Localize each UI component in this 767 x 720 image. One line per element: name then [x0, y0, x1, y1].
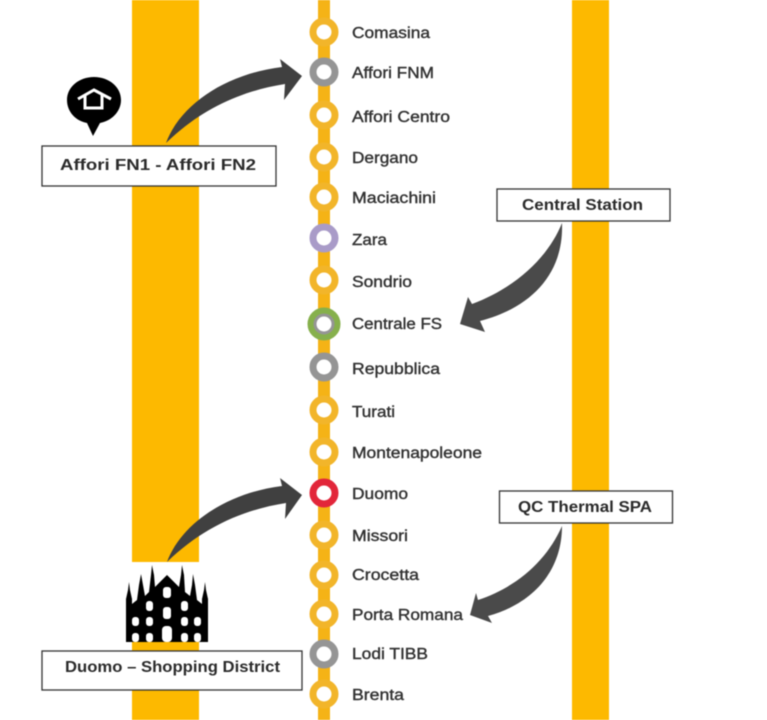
station markers	[311, 21, 337, 705]
station names: Repubblica	[352, 361, 440, 378]
callout: Central Station	[497, 189, 670, 221]
station names: Sondrio	[352, 274, 412, 291]
left yellow band	[132, 0, 199, 720]
station names: Montenapoleone	[352, 445, 482, 462]
station names: Dergano	[352, 150, 418, 167]
right yellow band	[572, 0, 609, 720]
callout: Duomo - Shopping District: Duomo – Shopping District	[65, 659, 280, 676]
icon: Duomo cathedral	[126, 565, 208, 642]
station names: Duomo	[352, 486, 408, 503]
station names: Zara	[352, 232, 387, 249]
arrow: Duomo	[167, 478, 302, 562]
arrow: QC Thermal SPA	[470, 526, 562, 623]
metro line	[318, 0, 330, 720]
station names: Lodi TIBB	[352, 646, 428, 663]
callout: QC Thermal SPA: QC Thermal SPA	[518, 499, 652, 516]
station names: Porta Romana	[352, 607, 463, 624]
station names: Missori	[352, 528, 408, 545]
white backing behind cathedral	[120, 562, 215, 642]
callout: QC Thermal SPA	[500, 491, 672, 523]
station names: Comasina	[352, 25, 430, 42]
station names: Maciachini	[352, 190, 436, 207]
station names: Turati	[352, 404, 395, 421]
icon: home pin	[67, 77, 121, 136]
station names: Brenta	[352, 687, 404, 704]
callout: Affori FN1 - Affori FN2: Affori FN1 - Affori FN2	[60, 157, 256, 174]
station names: Crocetta	[352, 567, 419, 584]
arrow: Central Station	[460, 223, 562, 332]
callout: Affori FN1 - Affori FN2	[42, 146, 276, 186]
station names: Centrale FS	[352, 316, 442, 333]
callout: Central Station: Central Station	[522, 197, 643, 214]
callout: Duomo - Shopping District	[42, 651, 302, 690]
arrow: Affori	[166, 59, 302, 143]
station names: Affori Centro	[352, 109, 450, 126]
station names: Affori FNM	[352, 65, 434, 82]
station names	[352, 25, 482, 704]
